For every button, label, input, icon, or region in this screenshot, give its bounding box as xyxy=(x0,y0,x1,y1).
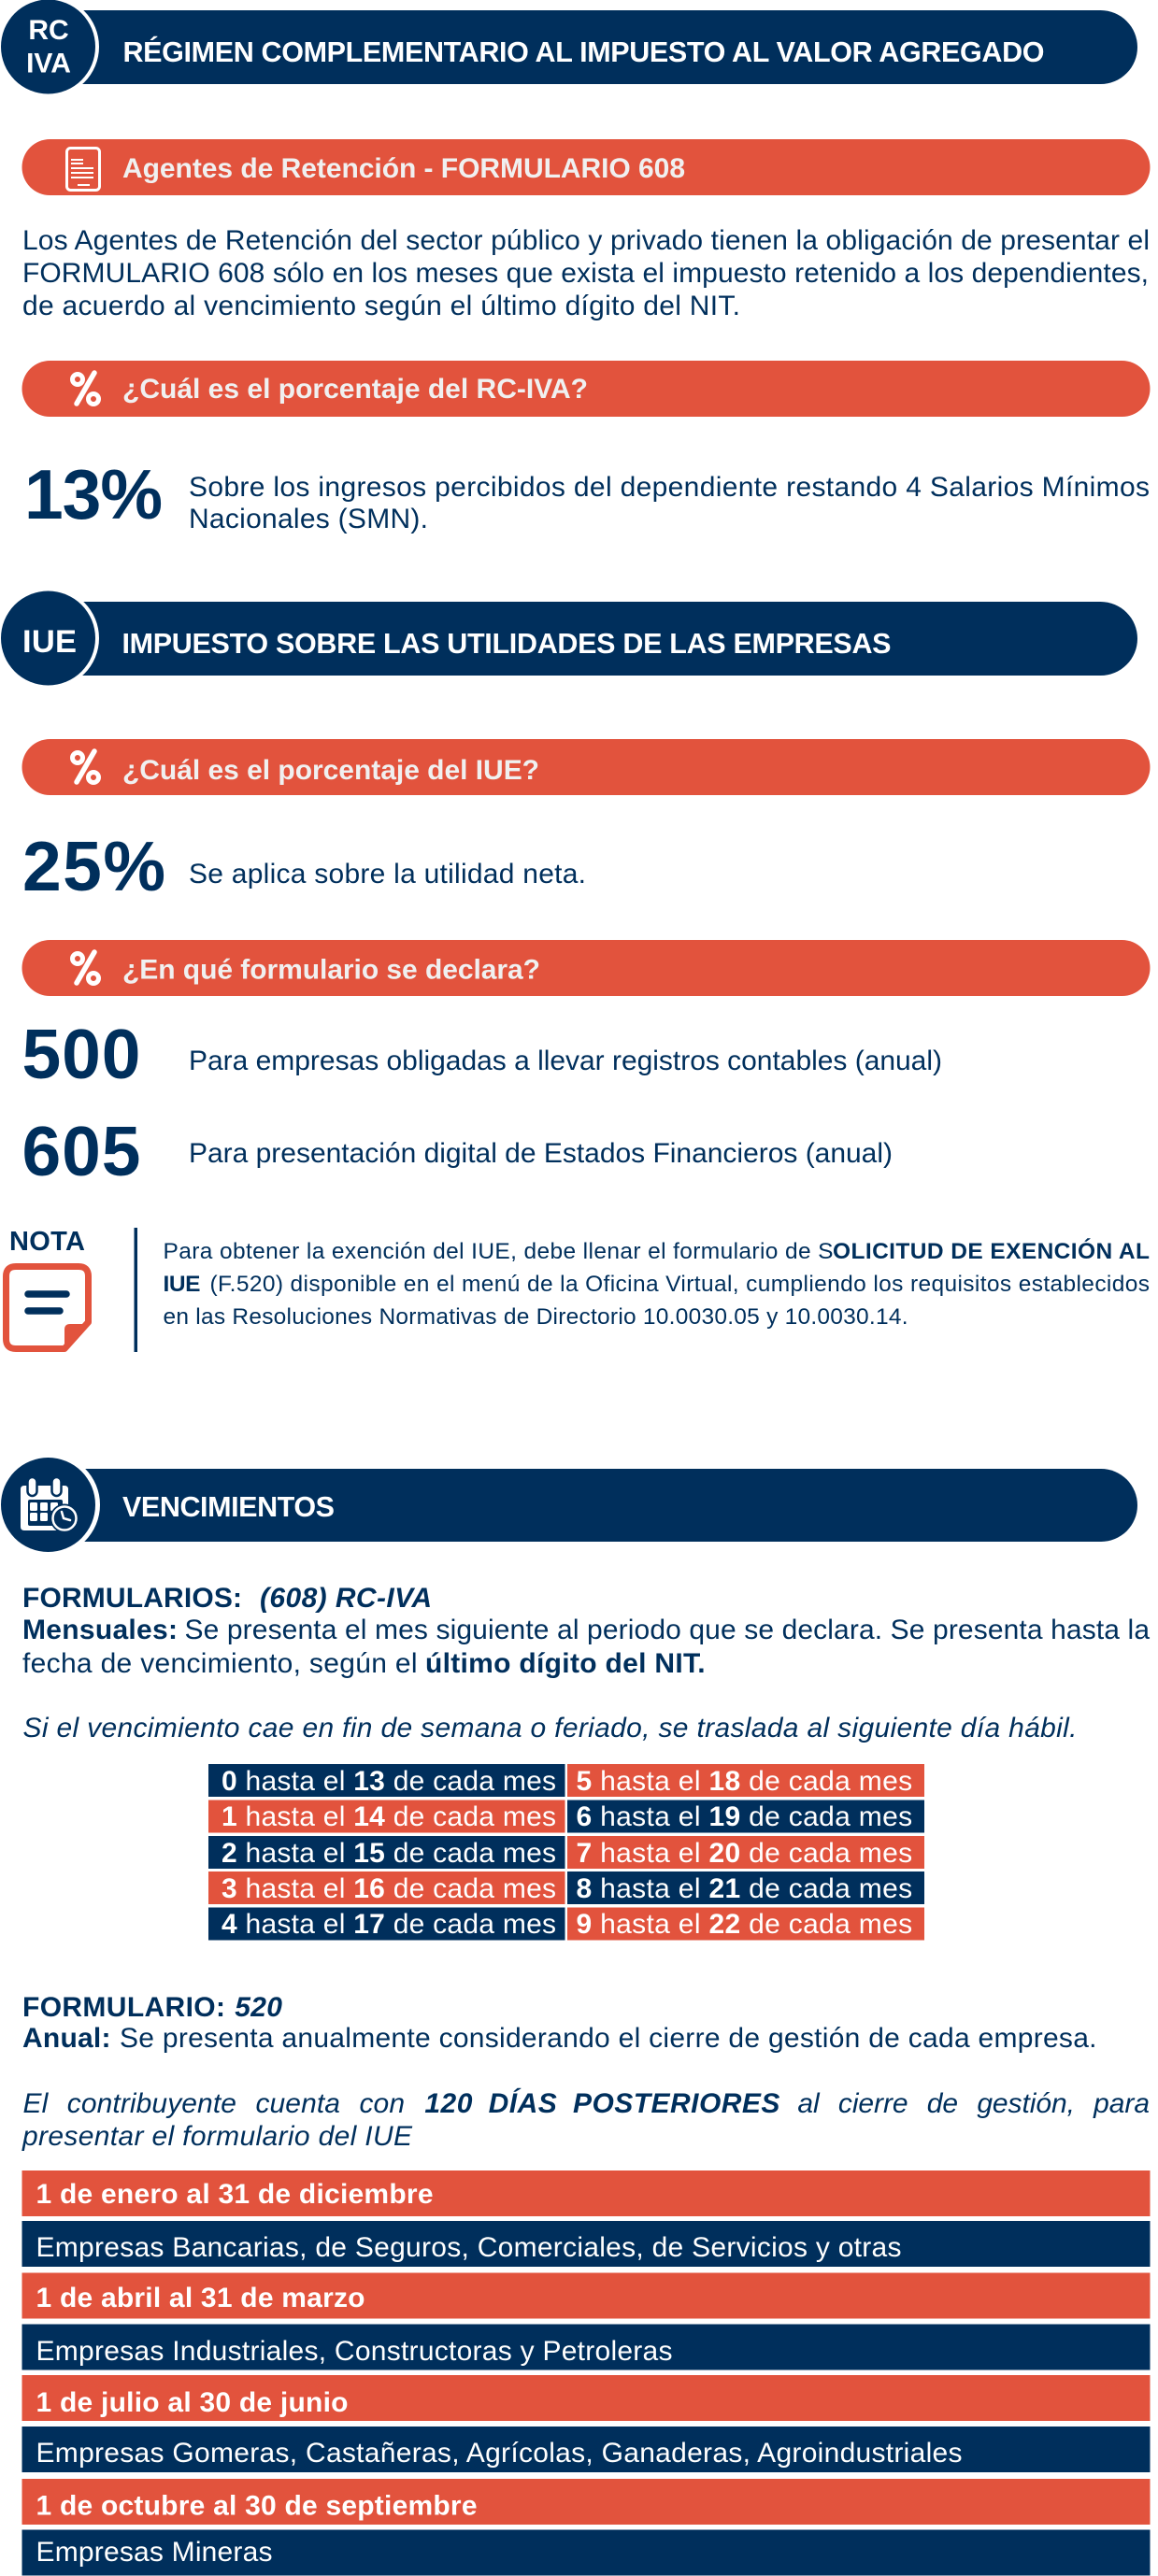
panel: RC-IVA section xyxy=(0,0,1150,534)
text block: formularios 608: Se presenta el mes siguiente al periodo que se declara. Se presenta hasta la xyxy=(185,1615,1150,1645)
text block: formulario 520: FORMULARIO: xyxy=(22,1992,225,2023)
text block: formularios 608: Si el vencimiento cae en fin de semana o feriado, se traslada al siguiente día hábil. xyxy=(22,1713,1077,1743)
banner: Vencimientos xyxy=(0,1454,1137,1557)
text block: obligation description: FORMULARIO 608 sólo en los meses que exista el impuesto retenido a los dependientes, xyxy=(22,258,1149,289)
row: abril a marzo: Empresas Industriales, Constructoras y Petroleras xyxy=(36,2336,673,2367)
table: vencimientos por dígito: 2 hasta el 15 de cada mes xyxy=(222,1838,556,1869)
banner: RC-IVA title: RÉGIMEN COMPLEMENTARIO AL IMPUESTO AL VALOR AGREGADO xyxy=(123,36,1045,68)
table: vencimientos por dígito: 4 hasta el 17 de cada mes xyxy=(222,1909,556,1940)
table: vencimientos por dígito: 3 hasta el 16 de cada mes xyxy=(222,1873,556,1904)
stat: form 605 xyxy=(22,1112,893,1190)
stat: form 500 xyxy=(22,1015,942,1093)
banner: RC-IVA title xyxy=(0,0,1137,97)
stat: form 605: 605 xyxy=(22,1112,140,1190)
stat: 13% xyxy=(24,455,1150,534)
banner: IUE title xyxy=(0,588,1137,689)
row: enero a diciembre xyxy=(22,2170,1150,2267)
table: vencimientos por dígito xyxy=(208,1764,924,1940)
pill: porcentaje IUE xyxy=(22,739,1150,795)
text block: formularios 608 xyxy=(22,1583,1150,1743)
pill: porcentaje RC-IVA: ¿Cuál es el porcentaje del RC-IVA? xyxy=(122,374,588,405)
stat: 13%: Sobre los ingresos percibidos del dependiente restando 4 Salarios Mínimos xyxy=(189,472,1150,503)
banner: IUE title: IMPUESTO SOBRE LAS UTILIDADES DE LAS EMPRESAS xyxy=(122,628,892,660)
table: vencimientos por dígito: 8 hasta el 21 de cada mes xyxy=(576,1873,912,1904)
stat: form 500: Para empresas obligadas a llevar registros contables (anual) xyxy=(189,1046,942,1076)
stat: 25%: 25% xyxy=(22,827,165,905)
table: vencimientos por dígito: 0 hasta el 13 de cada mes xyxy=(222,1766,556,1797)
callout: nota: en las Resoluciones Normativas de Directorio 10.0030.05 y 10.0030.14. xyxy=(163,1304,908,1330)
callout: nota xyxy=(6,1227,1150,1352)
text block: obligation description: de acuerdo al vencimiento según el último dígito del NIT. xyxy=(22,291,740,321)
text block: obligation description: Los Agentes de Retención del sector público y privado tienen la obligación de presentar el xyxy=(22,225,1150,256)
row: octubre a septiembre xyxy=(22,2479,1150,2575)
text block: formularios 608: Mensuales: xyxy=(22,1615,178,1645)
list: cierres de gestión por tipo de empresa xyxy=(22,2170,1150,2575)
callout: nota: OLICITUD DE EXENCIÓN AL xyxy=(833,1238,1150,1264)
stat: 13%: 13% xyxy=(24,455,163,534)
table: vencimientos por dígito: 1 hasta el 14 de cada mes xyxy=(222,1801,556,1832)
stat: 25% xyxy=(22,827,586,905)
row: julio a junio: Empresas Gomeras, Castañeras, Agrícolas, Ganaderas, Agroindustriales xyxy=(36,2438,963,2469)
text block: formulario 520: Anual: xyxy=(22,2023,110,2054)
stat: 25%: Se aplica sobre la utilidad neta. xyxy=(189,859,586,890)
text block: formulario 520: presentar el formulario del IUE xyxy=(21,2121,413,2152)
banner: Vencimientos: VENCIMIENTOS xyxy=(122,1491,335,1523)
banner: IUE title: IUE xyxy=(22,624,77,660)
pill: porcentaje RC-IVA xyxy=(22,361,1150,417)
callout: nota: (F.520) disponible en el menú de la Oficina Virtual, cumpliendo los requisitos establecidos xyxy=(209,1272,1150,1297)
text block: formulario 520 xyxy=(21,1992,1150,2152)
text block: formulario 520: Se presenta anualmente considerando el cierre de gestión de cada empresa. xyxy=(120,2023,1097,2054)
table: vencimientos por dígito: 9 hasta el 22 de cada mes xyxy=(576,1909,912,1940)
banner: RC-IVA title: IVA xyxy=(26,49,71,78)
row: octubre a septiembre: Empresas Mineras xyxy=(36,2537,273,2568)
callout: nota: IUE xyxy=(163,1272,200,1297)
text block: formularios 608: (608) RC-IVA xyxy=(260,1583,432,1614)
banner: RC-IVA title: RC xyxy=(28,15,69,46)
text block: formularios 608: fecha de vencimiento, según el xyxy=(22,1648,417,1679)
table: vencimientos por dígito: 7 hasta el 20 de cada mes xyxy=(576,1838,912,1869)
row: abril a marzo xyxy=(22,2272,1150,2370)
icon: calendar with clock xyxy=(21,1477,79,1532)
row: octubre a septiembre: 1 de octubre al 30 de septiembre xyxy=(36,2491,477,2521)
pill: Agentes de Retención xyxy=(22,139,1150,195)
text block: formularios 608: último dígito del NIT. xyxy=(425,1648,706,1679)
stat: form 500: 500 xyxy=(22,1015,140,1093)
table: vencimientos por dígito: 6 hasta el 19 de cada mes xyxy=(576,1801,912,1832)
row: julio a junio: 1 de julio al 30 de junio xyxy=(36,2387,348,2418)
pill: porcentaje IUE: ¿Cuál es el porcentaje del IUE? xyxy=(122,755,539,786)
text block: formulario 520: 520 xyxy=(235,1992,282,2023)
pill: Agentes de Retención: Agentes de Retención - FORMULARIO 608 xyxy=(122,153,685,184)
panel: IUE section xyxy=(0,588,1150,1352)
callout: nota: NOTA xyxy=(9,1227,85,1257)
text block: formulario 520: El contribuyente cuenta con xyxy=(22,2088,405,2119)
text block: formulario 520: al cierre de gestión, para xyxy=(797,2088,1150,2119)
panel: Vencimientos section xyxy=(0,1454,1150,2575)
callout: nota: Para obtener la exención del IUE, debe llenar el formulario de S xyxy=(163,1239,834,1264)
table: vencimientos por dígito: 5 hasta el 18 de cada mes xyxy=(576,1766,912,1797)
stat: form 605: Para presentación digital de Estados Financieros (anual) xyxy=(189,1138,893,1169)
pill: formulario xyxy=(22,940,1150,996)
text block: formularios 608: FORMULARIOS: xyxy=(22,1583,242,1614)
row: enero a diciembre: Empresas Bancarias, de Seguros, Comerciales, de Servicios y otras xyxy=(36,2232,901,2263)
text block: obligation description xyxy=(22,225,1150,321)
row: enero a diciembre: 1 de enero al 31 de diciembre xyxy=(36,2179,434,2210)
row: abril a marzo: 1 de abril al 31 de marzo xyxy=(36,2283,365,2313)
row: julio a junio xyxy=(22,2375,1150,2472)
pill: formulario: ¿En qué formulario se declara? xyxy=(122,955,540,985)
text block: formulario 520: 120 DÍAS POSTERIORES xyxy=(424,2087,779,2119)
stat: 13%: Nacionales (SMN). xyxy=(189,504,428,534)
